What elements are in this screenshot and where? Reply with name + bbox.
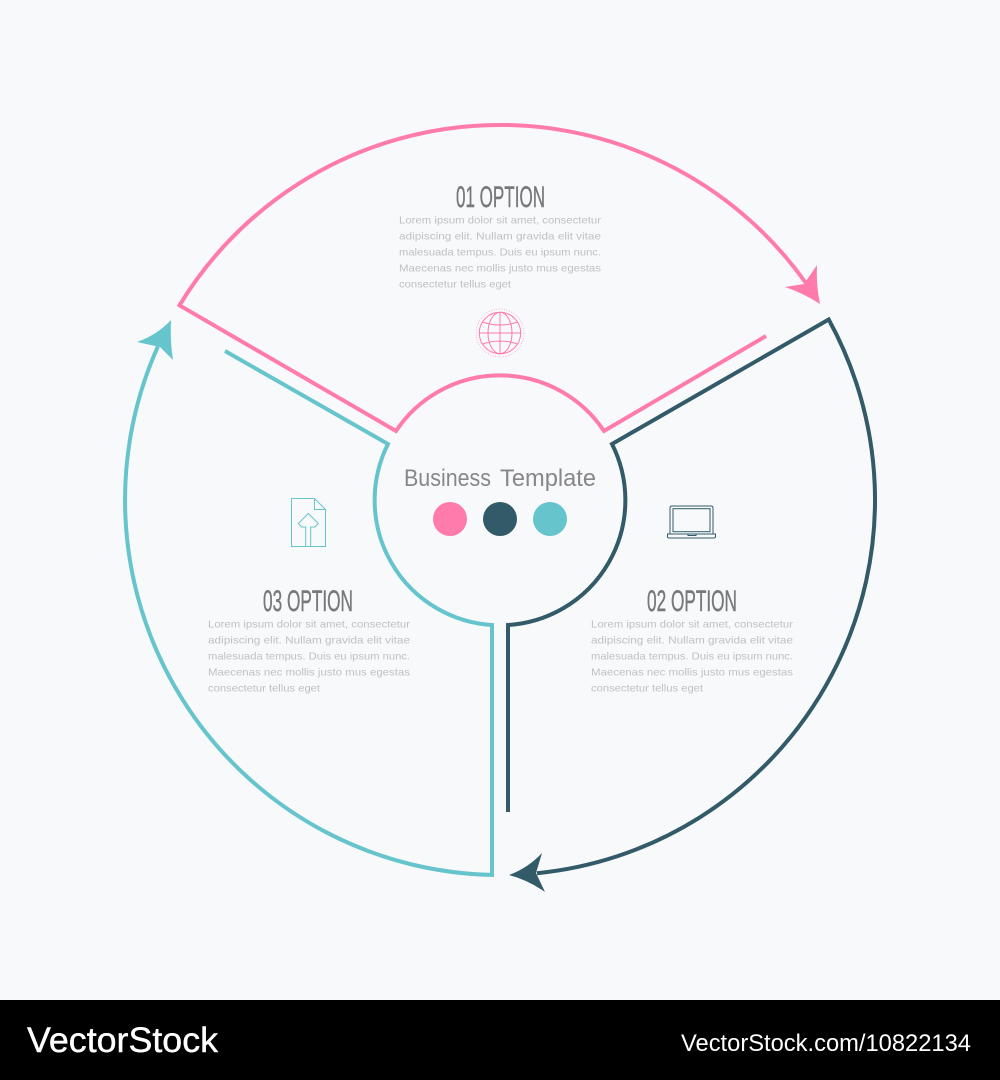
teal segment outline (125, 346, 492, 875)
text block: 01 option: Lorem ipsum dolor sit amet, consectetur (399, 216, 602, 226)
center title: Business Template: Template (500, 465, 596, 492)
text block: 02 option: adipiscing elit. Nullam gravida elit vitae (591, 636, 793, 646)
text block: 01 option: consectetur tellus eget (399, 280, 511, 290)
footer brand: VectorStock (27, 1021, 219, 1060)
icon: laptop (668, 506, 716, 538)
text block: 03 option: adipiscing elit. Nullam gravida elit vitae (208, 636, 410, 646)
center title: Business Template: Business (404, 465, 491, 492)
panel: 02 option (dark segment) (508, 320, 875, 892)
heading: 02 option: 02 OPTION (647, 585, 737, 618)
footer url: VectorStock.com/10822134 (681, 1030, 971, 1057)
heading: 03 option: 03 OPTION (263, 585, 353, 618)
text block: 02 option (591, 620, 794, 694)
pink segment outline (180, 125, 806, 431)
arrow: pink (785, 265, 820, 304)
panel: 03 option (teal segment) (125, 320, 492, 875)
text block: 03 option: Lorem ipsum dolor sit amet, consectetur (208, 620, 411, 630)
center title: Business Template (404, 465, 596, 492)
text block: 01 option: malesuada tempus. Duis eu ipsum nunc. (399, 248, 601, 258)
center colour dots (433, 502, 567, 536)
text block: 02 option: consectetur tellus eget (591, 684, 703, 694)
text block: 01 option (399, 216, 602, 290)
text block: 02 option: malesuada tempus. Duis eu ipsum nunc. (591, 652, 793, 662)
text block: 02 option: Lorem ipsum dolor sit amet, consectetur (591, 620, 794, 630)
text block: 03 option: Maecenas nec mollis justo mus egestas (208, 668, 410, 678)
text block: 02 option: Maecenas nec mollis justo mus egestas (591, 668, 793, 678)
text block: 01 option: adipiscing elit. Nullam gravida elit vitae (399, 232, 601, 242)
icon: globe (476, 309, 524, 357)
icon: document upload (292, 498, 326, 546)
footer bar (0, 1000, 1000, 1080)
text block: 03 option: consectetur tellus eget (208, 684, 320, 694)
text block: 03 option: malesuada tempus. Duis eu ipsum nunc. (208, 652, 410, 662)
arrow: dark (509, 853, 545, 892)
heading: 01 option: 01 OPTION (456, 181, 545, 214)
text block: 01 option: Maecenas nec mollis justo mus egestas (399, 264, 601, 274)
panel: 01 option (pink segment) (180, 125, 820, 431)
text block: 03 option (208, 620, 411, 694)
arrow: teal (137, 320, 173, 360)
dark segment outline (508, 320, 875, 873)
